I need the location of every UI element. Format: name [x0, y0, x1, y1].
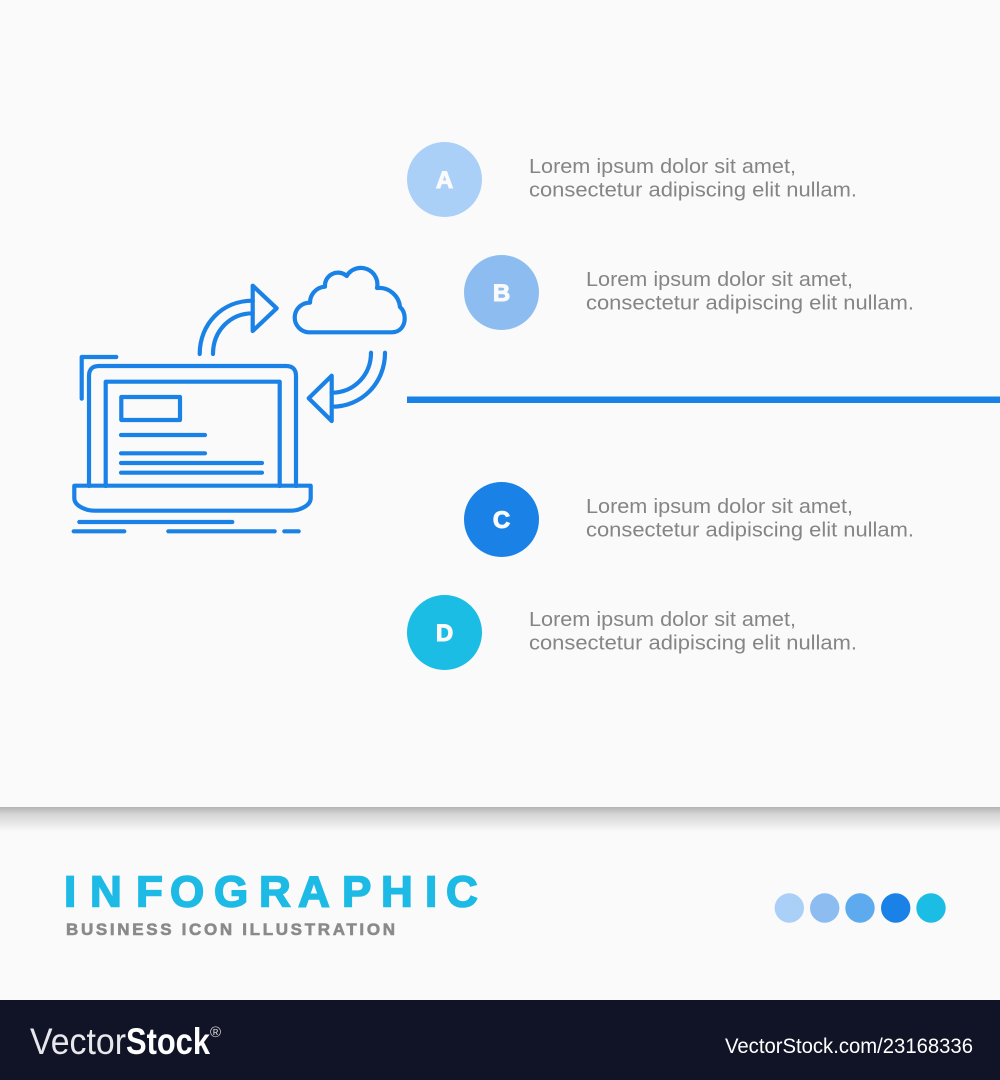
icon: cloud	[295, 268, 405, 332]
icon: laptop with cloud sync	[74, 268, 405, 531]
item C	[464, 482, 914, 557]
badge D: D	[436, 620, 453, 647]
footer bar	[0, 1000, 1000, 1080]
icon: arrow to cloud	[200, 286, 277, 354]
title: INFOGRAPHIC	[64, 868, 478, 916]
footer image id: VectorStock.com/23168336	[725, 1035, 973, 1058]
subtitle: BUSINESS ICON ILLUSTRATION	[66, 920, 395, 939]
text B	[586, 268, 914, 314]
text D	[529, 608, 857, 654]
badge B	[464, 255, 539, 330]
badge B: B	[493, 280, 510, 307]
text B: consectetur adipiscing elit nullam.	[586, 292, 914, 314]
text D: Lorem ipsum dolor sit amet,	[529, 608, 796, 631]
horizontal divider line	[407, 396, 1000, 403]
badge C	[464, 482, 539, 557]
text A	[529, 155, 857, 202]
footer logo: Vector	[30, 1021, 126, 1062]
badge C: C	[493, 507, 510, 534]
footer logo	[30, 1021, 221, 1062]
item D	[407, 595, 857, 670]
item A	[407, 142, 857, 217]
text B: Lorem ipsum dolor sit amet,	[586, 268, 853, 291]
footer logo: Stock	[126, 1021, 210, 1062]
palette dots	[775, 893, 946, 923]
text A: Lorem ipsum dolor sit amet,	[529, 155, 796, 178]
icon: arrow to laptop	[309, 353, 385, 421]
badge A	[407, 142, 482, 217]
text A: consectetur adipiscing elit nullam.	[529, 178, 857, 202]
icon: laptop	[74, 357, 311, 531]
panel shadow band	[0, 807, 1000, 832]
text D: consectetur adipiscing elit nullam.	[529, 632, 857, 654]
item B	[464, 255, 914, 330]
text C: consectetur adipiscing elit nullam.	[586, 518, 914, 542]
text C: Lorem ipsum dolor sit amet,	[586, 495, 853, 518]
text C	[586, 495, 914, 542]
footer logo: ®	[210, 1024, 221, 1041]
badge D	[407, 595, 482, 670]
badge A: A	[436, 167, 453, 194]
